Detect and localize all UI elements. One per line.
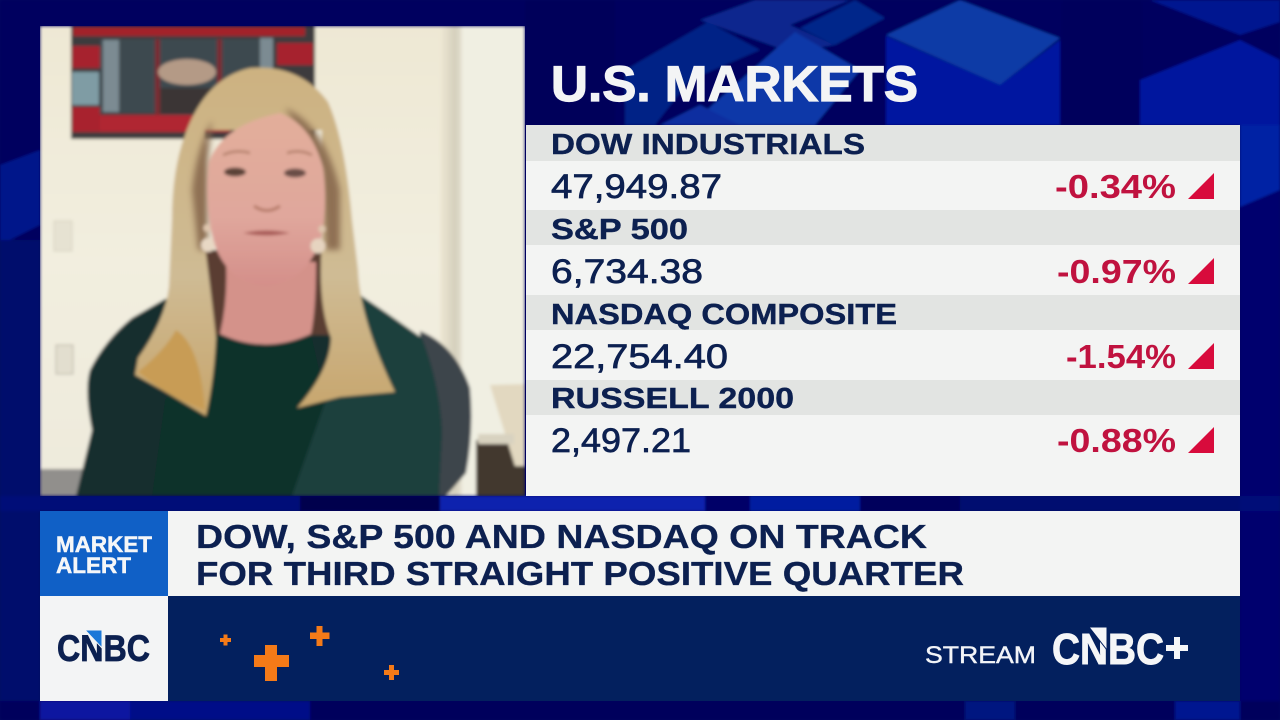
stream CNBC+ promo bbox=[925, 625, 1188, 674]
bottom navy bar bbox=[168, 596, 1240, 701]
hair bbox=[135, 68, 395, 416]
heading: U.S. MARKETS: U.S. MARKETS bbox=[551, 56, 918, 112]
nose and mouth bbox=[243, 206, 290, 236]
framed picture bbox=[71, 26, 315, 139]
headline banner: FOR THIRD STRAIGHT POSITIVE QUARTER bbox=[196, 555, 964, 592]
wall switch and outlet bbox=[54, 221, 73, 374]
row: Dow Industrials bbox=[526, 125, 1240, 206]
green jacket bbox=[76, 289, 442, 496]
icon: orange plus signs bbox=[220, 626, 399, 681]
row: Russell 2000: 2,497.21 bbox=[551, 422, 691, 460]
row: Russell 2000: -0.88% bbox=[1057, 422, 1176, 459]
dark inner top bbox=[152, 334, 326, 496]
row: Dow Industrials: DOW INDUSTRIALS bbox=[551, 129, 865, 161]
hair inner shadows bbox=[192, 108, 340, 250]
face bbox=[207, 113, 325, 286]
row: Russell 2000: RUSSELL 2000 bbox=[551, 383, 794, 415]
row: Nasdaq Composite: 22,754.40 bbox=[551, 338, 728, 376]
row: Russell 2000 bbox=[526, 380, 1240, 460]
row: Nasdaq Composite: -1.54% bbox=[1066, 338, 1176, 375]
eyes and brows bbox=[223, 151, 312, 178]
CNBC logo tile: CNBC bbox=[57, 628, 150, 669]
row: S&P 500: 6,734.38 bbox=[551, 253, 703, 291]
stream CNBC+ promo: STREAM bbox=[925, 642, 1036, 669]
neck and chest bbox=[220, 262, 316, 344]
panel: market index table bbox=[526, 125, 1240, 496]
chair bbox=[420, 331, 471, 496]
right drape of jacket bbox=[290, 289, 442, 496]
market alert badge bbox=[40, 511, 168, 596]
market alert badge: MARKET bbox=[56, 532, 153, 557]
row: Dow Industrials: -0.34% bbox=[1055, 168, 1176, 205]
row: S&P 500: S&P 500 bbox=[551, 214, 688, 246]
hair back shadow bbox=[200, 250, 336, 335]
video panel: guest in office bbox=[40, 26, 525, 496]
hair highlight bbox=[138, 330, 205, 410]
row: Nasdaq Composite: NASDAQ COMPOSITE bbox=[551, 299, 897, 331]
office wall bbox=[40, 26, 525, 496]
row: S&P 500: -0.97% bbox=[1057, 253, 1176, 290]
market alert badge: ALERT bbox=[56, 553, 132, 578]
headline banner bbox=[168, 511, 1240, 596]
CNBC logo tile bbox=[40, 596, 168, 701]
row: Dow Industrials: 47,949.87 bbox=[551, 168, 722, 206]
stream CNBC+ promo: CNBC bbox=[1052, 625, 1164, 674]
desk bbox=[476, 384, 525, 496]
earrings bbox=[201, 224, 326, 254]
headline banner: DOW, S&P 500 AND NASDAQ ON TRACK bbox=[196, 518, 927, 555]
row: Nasdaq Composite bbox=[526, 295, 1240, 376]
row: S&P 500 bbox=[526, 210, 1240, 291]
